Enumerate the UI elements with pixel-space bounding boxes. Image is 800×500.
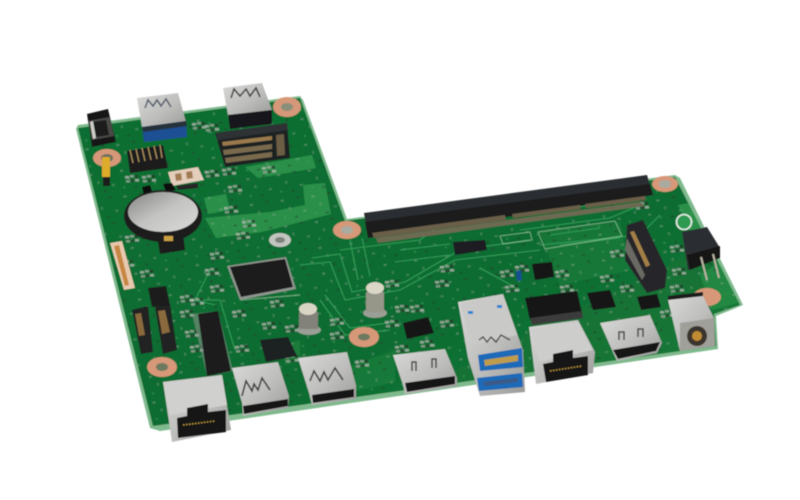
ethernet port right <box>529 320 595 384</box>
usb port top left <box>137 93 187 142</box>
copper planes <box>90 155 738 420</box>
copper mounting holes <box>93 97 721 377</box>
usb port top centre <box>223 83 272 129</box>
large pcie slot <box>364 175 653 243</box>
smd component clusters <box>120 122 686 368</box>
hdmi port right <box>600 315 662 361</box>
hdmi port centre <box>393 349 457 394</box>
board: green PCB <box>70 90 750 435</box>
white battery connector <box>168 167 204 190</box>
port 2 <box>298 352 356 405</box>
left connectors and chips <box>132 240 661 376</box>
usb 3 dual port centre <box>458 294 525 396</box>
ethernet port left <box>163 375 231 442</box>
coin cell battery <box>124 183 202 254</box>
standoff screws <box>297 282 387 335</box>
m.2 socket top <box>215 123 290 167</box>
port 1 <box>232 362 289 416</box>
traces <box>188 200 660 350</box>
audio jack top left <box>87 109 116 147</box>
barrel jack <box>668 292 715 351</box>
certification logo <box>676 214 692 230</box>
board edge <box>76 96 743 431</box>
component texture <box>84 108 735 421</box>
qfp main chip <box>227 257 296 300</box>
power header right <box>682 227 720 280</box>
pin header <box>127 145 168 173</box>
vertical m.2 socket right <box>625 220 667 293</box>
illustration: circuit board photo <box>76 82 744 442</box>
ribbon connector left <box>110 241 135 290</box>
yellow jumper <box>102 157 110 186</box>
